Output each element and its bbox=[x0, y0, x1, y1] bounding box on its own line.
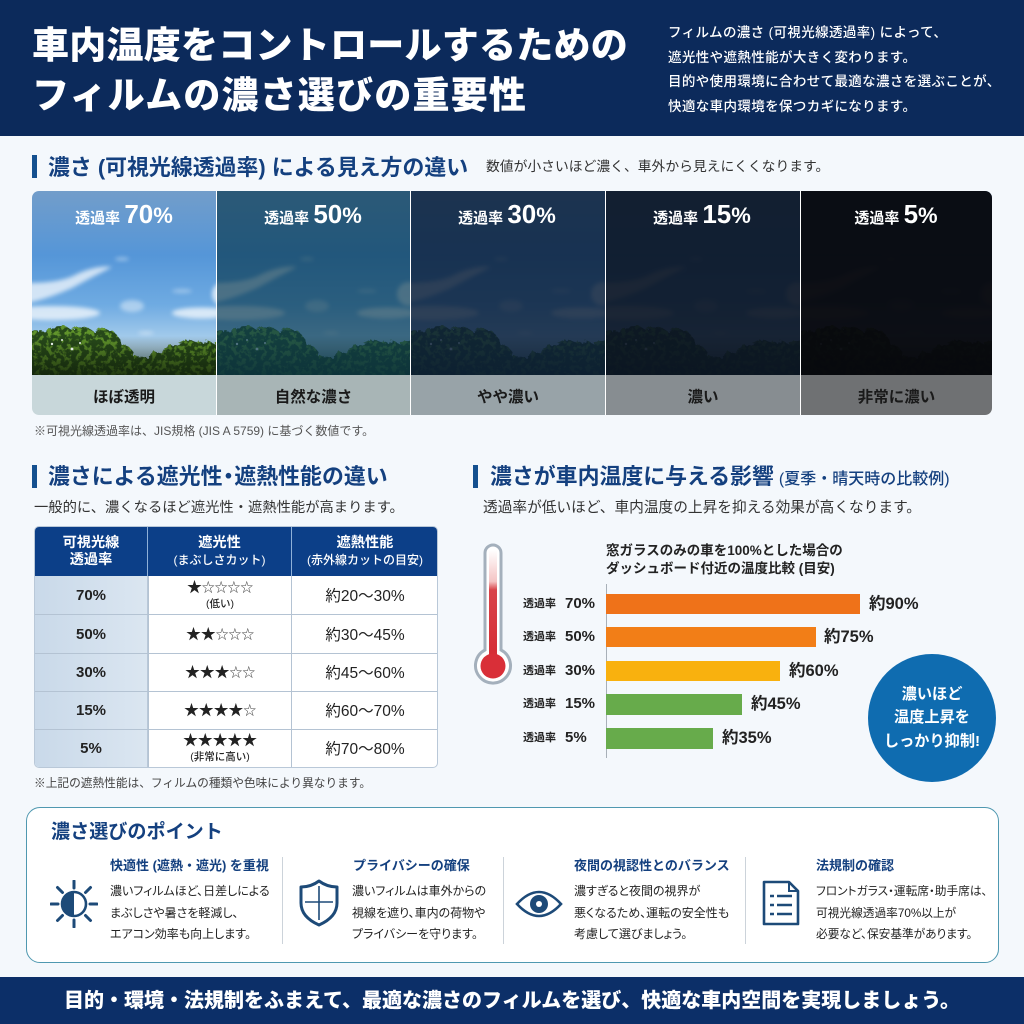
point text: 濃いフィルムほど、日差しによる bbox=[110, 884, 270, 898]
photo scenes bbox=[32, 191, 992, 375]
point: privacy bbox=[300, 858, 486, 941]
point heading: 法規制の確認 bbox=[816, 858, 894, 873]
caption band: 15% bbox=[606, 375, 800, 415]
bar chart bbox=[523, 584, 919, 758]
stars: ★☆☆☆☆ bbox=[187, 579, 253, 596]
stars bbox=[148, 576, 292, 614]
heading accent bar bbox=[32, 465, 37, 488]
photo: 50% bbox=[217, 191, 410, 375]
header description: フィルムの濃さ (可視光線透過率) によって、 bbox=[668, 25, 947, 40]
row 5% bbox=[80, 730, 405, 767]
row 15% bbox=[35, 691, 437, 730]
point text bbox=[574, 884, 729, 941]
percent: 15% bbox=[76, 702, 106, 718]
caption band: 70% bbox=[32, 375, 216, 415]
point text: まぶしさや暑さを軽減し、 bbox=[110, 906, 239, 920]
photo: 5% bbox=[801, 191, 992, 375]
panel: performance table bbox=[35, 527, 437, 767]
stars: (低い) bbox=[206, 598, 234, 610]
point text: 視線を遮り、車内の荷物や bbox=[352, 906, 485, 920]
callout: しっかり抑制! bbox=[884, 733, 980, 750]
icon: shield bbox=[300, 880, 338, 926]
percent: 50% bbox=[76, 626, 106, 642]
photo: 15% bbox=[606, 191, 800, 375]
chart axis bbox=[606, 584, 607, 758]
bar value: 70%: 約90% bbox=[869, 595, 919, 613]
divider bbox=[745, 857, 746, 944]
heat range: 約20～30% bbox=[325, 588, 405, 605]
header description: 快適な車内環境を保つカギになります。 bbox=[668, 98, 916, 114]
stars: ★★★★★ bbox=[183, 732, 257, 749]
bar: 15% bbox=[606, 694, 742, 715]
bar: 70% bbox=[606, 594, 860, 614]
footer message: 目的・環境・法規制をふまえて、最適な濃さのフィルムを選び、快適な車内空間を実現しましょう。 bbox=[64, 990, 960, 1012]
row 50% bbox=[35, 615, 437, 654]
bar value: 30%: 約60% bbox=[789, 662, 839, 680]
row percent: 70%: 70% bbox=[565, 595, 595, 612]
point heading: 快適性 (遮熱・遮光) を重視 bbox=[110, 858, 269, 873]
callout: 温度上昇を bbox=[894, 709, 970, 726]
icon: eye bbox=[515, 890, 563, 918]
stars bbox=[148, 653, 292, 691]
row percent: 5%: 5% bbox=[565, 729, 587, 746]
stars: (非常に高い) bbox=[190, 751, 250, 763]
stars bbox=[148, 615, 292, 653]
footnote: JIS: ※可視光線透過率は、JIS規格 (JIS A 5759) に基づく数値です。 bbox=[34, 424, 374, 438]
title bbox=[32, 25, 628, 116]
point heading: プライバシーの確保 bbox=[353, 858, 470, 873]
footnote: table: ※上記の遮熱性能は、フィルムの種類や色味により異なります。 bbox=[34, 777, 371, 790]
panel: tint comparison photo strip bbox=[32, 191, 992, 415]
section heading: temperature: 濃さが車内温度に与える影響 (夏季・晴天時の比較例) bbox=[490, 464, 950, 489]
caption band: 5% bbox=[801, 375, 992, 415]
point heading: 夜間の視認性とのバランス bbox=[574, 858, 730, 873]
point text: プライバシーを守ります。 bbox=[352, 927, 478, 941]
caption band: 5%: 非常に濃い bbox=[858, 389, 935, 406]
callout bbox=[868, 654, 996, 782]
bar: 30% bbox=[606, 661, 780, 681]
header: transmittance bbox=[35, 527, 148, 576]
row 30% bbox=[35, 653, 437, 692]
header: heat: (赤外線カットの目安) bbox=[307, 552, 423, 566]
section intro: 透過率が低いほど、車内温度の上昇を抑える効果が高くなります。 bbox=[483, 500, 921, 516]
bar value: 15%: 約45% bbox=[751, 695, 801, 713]
photo: 70% bbox=[32, 191, 216, 375]
percent: 30% bbox=[76, 664, 106, 680]
section intro: 一般的に、濃くなるほど遮光性・遮熱性能が高まります。 bbox=[34, 500, 404, 516]
header description: 遮光性や遮熱性能が大きく変わります。 bbox=[668, 50, 916, 64]
header: heat: 遮熱性能 bbox=[337, 534, 393, 550]
point text: エアコン効率も向上します。 bbox=[110, 927, 251, 941]
title: フィルムの濃さ選びの重要性 bbox=[32, 75, 527, 116]
point text: 悪くなるため、運転の安全性も bbox=[574, 906, 729, 920]
row label: 15%: 透過率 bbox=[523, 698, 556, 710]
header: glare: (まぶしさカット) bbox=[174, 552, 266, 566]
row label: 5%: 透過率 bbox=[523, 732, 556, 744]
bar: 5% bbox=[606, 728, 713, 749]
point text bbox=[110, 884, 270, 941]
divider bbox=[503, 857, 504, 944]
chart title: 窓ガラスのみの車を100%とした場合の bbox=[606, 543, 843, 558]
header: transmittance: 透過率 bbox=[70, 552, 112, 568]
row percent: 50%: 50% bbox=[565, 628, 595, 645]
section heading: visibility: 濃さ (可視光線透過率) による見え方の違い bbox=[48, 155, 468, 180]
chart title bbox=[606, 543, 843, 576]
point text: 濃いフィルムは車外からの bbox=[352, 884, 486, 898]
row 70% bbox=[35, 576, 437, 615]
header band bbox=[0, 0, 1024, 136]
header description: 目的や使用環境に合わせて最適な濃さを選ぶことが、 bbox=[668, 74, 1001, 89]
point text: 可視光線透過率70%以上が bbox=[816, 906, 956, 920]
row label: 30%: 透過率 bbox=[523, 665, 556, 677]
icon: document bbox=[762, 880, 800, 926]
footer band bbox=[0, 977, 1024, 1024]
header: glare bbox=[148, 527, 292, 576]
icon: sun bbox=[50, 880, 98, 928]
first column shading bbox=[35, 576, 148, 767]
row percent: 30%: 30% bbox=[565, 662, 595, 679]
divider bbox=[282, 857, 283, 944]
row percent: 15%: 15% bbox=[565, 695, 595, 712]
point text: 考慮して選びましょう。 bbox=[574, 927, 687, 941]
point text: 必要など、保安基準があります。 bbox=[816, 928, 972, 941]
callout: 濃いほど bbox=[902, 686, 962, 703]
panel heading: 濃さ選びのポイント bbox=[51, 822, 223, 843]
header: glare: 遮光性 bbox=[198, 534, 241, 550]
title: 車内温度をコントロールするための bbox=[32, 25, 628, 66]
tint label: 70%: 透過率 70% bbox=[75, 199, 173, 229]
caption band: 15%: 濃い bbox=[687, 389, 718, 406]
header: transmittance: 可視光線 bbox=[63, 534, 119, 550]
point text bbox=[816, 884, 987, 941]
caption band: 50%: 自然な濃さ bbox=[275, 389, 352, 406]
caption band: 30% bbox=[411, 375, 605, 415]
caption band: 70%: ほぼ透明 bbox=[93, 389, 155, 406]
point text: フロントガラス・運転席・助手席は、 bbox=[816, 885, 987, 898]
table header bbox=[35, 527, 437, 576]
photo: 30% bbox=[411, 191, 605, 375]
point text bbox=[352, 884, 486, 941]
heat range: 約70～80% bbox=[325, 741, 405, 758]
percent: 70% bbox=[76, 586, 106, 604]
heat range: 約30～45% bbox=[325, 627, 405, 644]
section heading: shading performance: 濃さによる遮光性・遮熱性能の違い bbox=[48, 464, 388, 489]
row label: 50%: 透過率 bbox=[523, 631, 556, 643]
heading accent bar bbox=[32, 155, 37, 178]
bar: 50% bbox=[606, 627, 816, 647]
chart title: ダッシュボード付近の温度比較 (目安) bbox=[606, 561, 835, 576]
stars: ★★☆☆☆ bbox=[186, 626, 254, 642]
stars: ★★★★☆ bbox=[184, 702, 256, 718]
stars bbox=[148, 691, 292, 729]
stars: ★★★☆☆ bbox=[185, 664, 255, 680]
caption band: 30%: やや濃い bbox=[477, 389, 539, 406]
header description bbox=[668, 25, 1001, 114]
tint label: 30%: 透過率 30% bbox=[458, 199, 556, 229]
percent: 5% bbox=[80, 740, 102, 756]
bar value: 50%: 約75% bbox=[824, 628, 874, 646]
heading accent bar bbox=[473, 465, 478, 488]
tint label: 50%: 透過率 50% bbox=[264, 199, 362, 229]
point: comfort bbox=[50, 858, 270, 941]
bar value: 5%: 約35% bbox=[722, 729, 772, 747]
point text: 濃すぎると夜間の視界が bbox=[574, 884, 700, 898]
panel: selection points bbox=[26, 807, 999, 963]
header: heat bbox=[307, 534, 423, 566]
section note: 数値が小さいほど濃く、車外から見えにくくなります。 bbox=[486, 159, 829, 174]
caption band: 50% bbox=[217, 375, 410, 415]
heat range: 約60～70% bbox=[325, 703, 405, 720]
stars bbox=[148, 729, 292, 767]
tint label: 15%: 透過率 15% bbox=[653, 199, 751, 229]
heat range: 約45～60% bbox=[325, 665, 405, 682]
tint label: 5%: 透過率 5% bbox=[854, 199, 938, 229]
point: night visibility bbox=[515, 858, 730, 941]
point: regulations bbox=[762, 858, 987, 941]
icon: thermometer bbox=[474, 544, 512, 685]
row label: 70%: 透過率 bbox=[523, 598, 556, 610]
